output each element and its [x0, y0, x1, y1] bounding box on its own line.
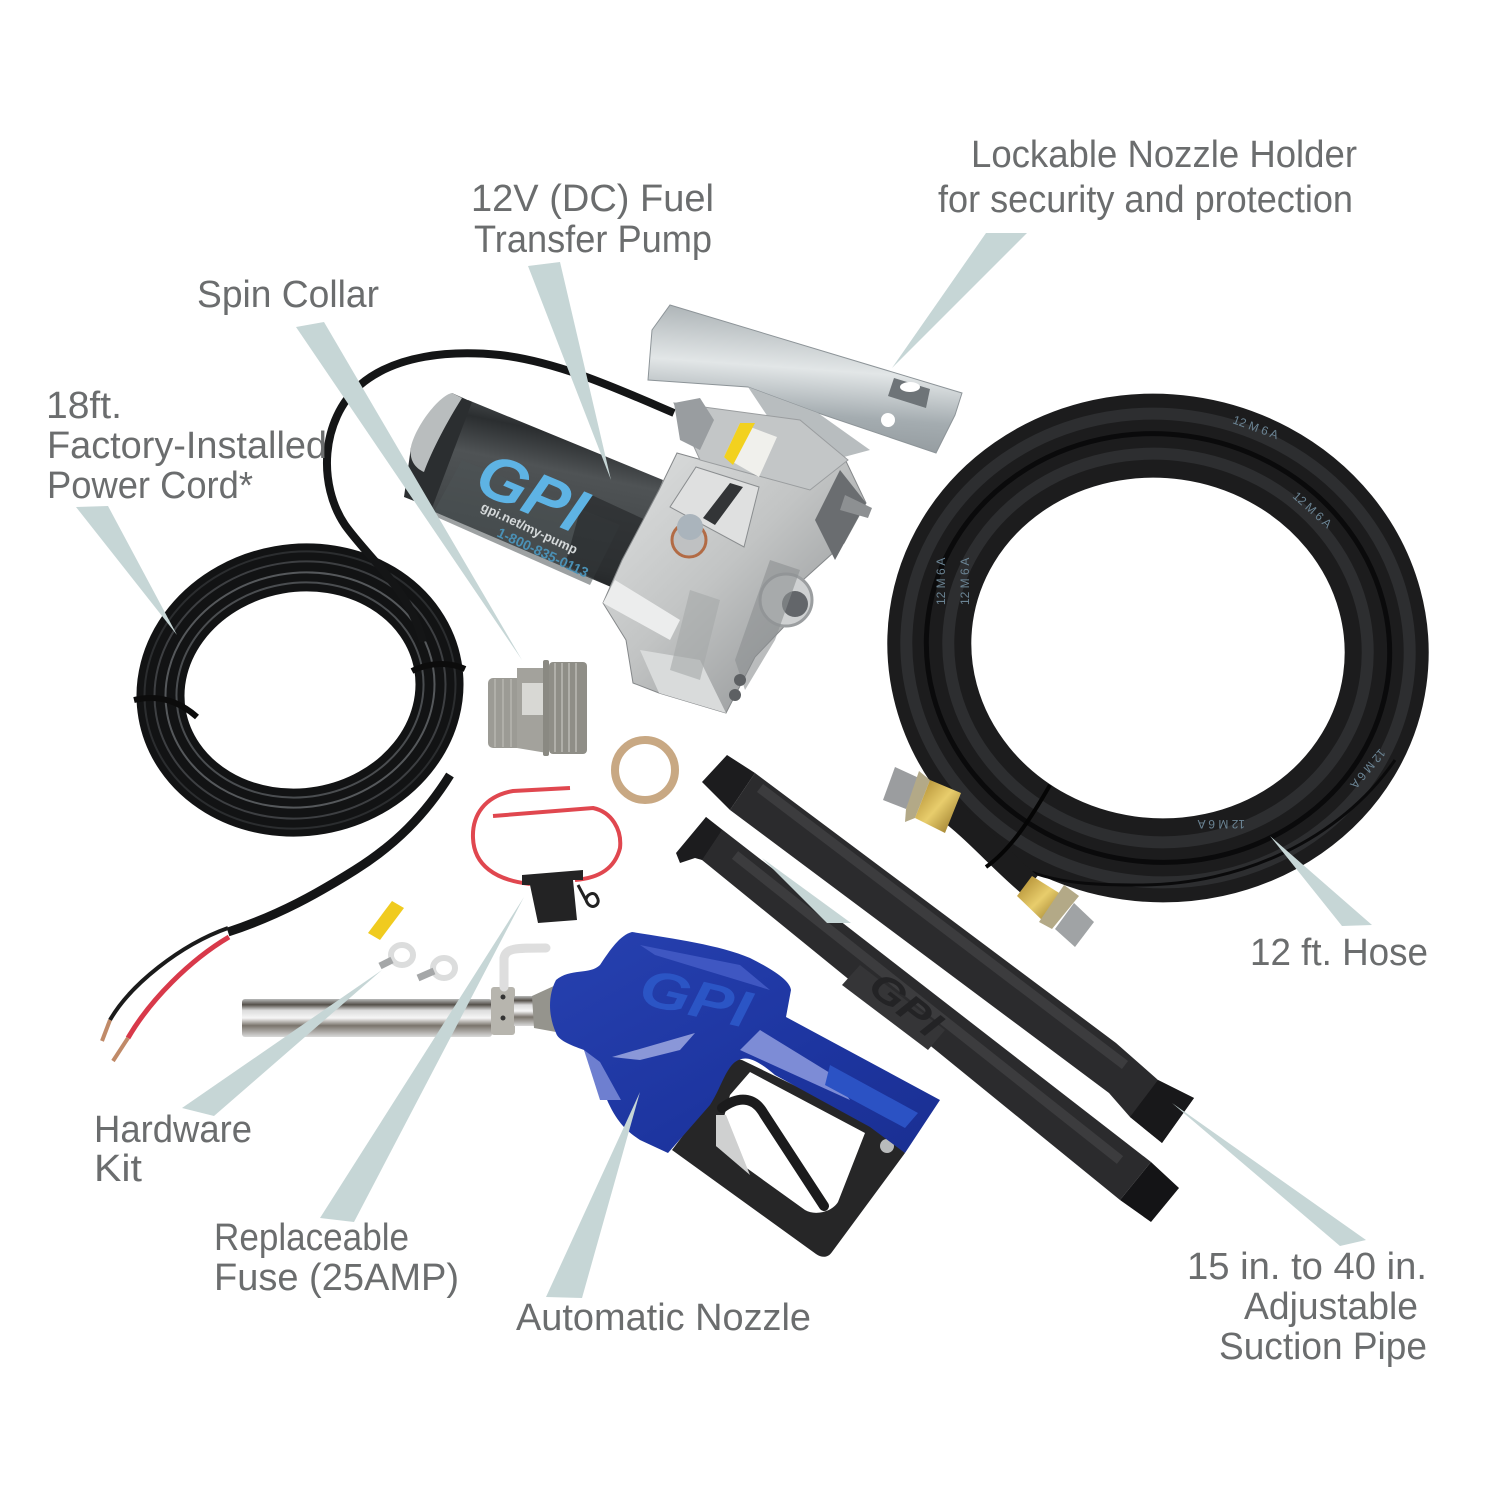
- label: hardware kit: [94, 1109, 252, 1190]
- callout pointer: hose: [1270, 836, 1372, 926]
- motor logo: GPI: [467, 439, 598, 547]
- suction pipe lower: GPI: [860, 964, 951, 1047]
- cord wire ends: [102, 928, 229, 1061]
- label: fuel transfer pump: Transfer Pump: [474, 219, 712, 261]
- cord lead to wire ends: [228, 775, 450, 932]
- hardware kit: [368, 901, 455, 978]
- label: automatic nozzle: Automatic Nozzle: [516, 1297, 811, 1339]
- callout pointer: lockable nozzle holder: [892, 233, 1027, 368]
- callout pointer: hardware kit: [182, 970, 382, 1116]
- label: suction pipe: Suction Pipe: [1219, 1326, 1427, 1368]
- suction pipe upper: [702, 755, 1194, 1143]
- hose print markings: [934, 413, 1388, 831]
- fuse wire: [473, 788, 620, 884]
- automatic nozzle body: [550, 932, 940, 1153]
- label: power cord: Power Cord*: [47, 465, 253, 507]
- automatic nozzle handle and trigger: [672, 1057, 905, 1257]
- label: lockable nozzle holder: Lockable Nozzle Holder: [971, 134, 1357, 176]
- fuse holder: [522, 870, 598, 923]
- label: fuse: Replaceable: [214, 1217, 409, 1259]
- hose fitting top: [883, 767, 961, 833]
- pump: nozzle holder bracket: [648, 305, 962, 457]
- hose print markings: 12 M 6 A: [1198, 817, 1245, 831]
- callout pointer: fuse: [320, 897, 524, 1222]
- hose coil: [876, 381, 1440, 915]
- spin collar: [488, 660, 587, 756]
- pump: gear housing: [603, 398, 872, 713]
- automatic nozzle spout: [242, 948, 556, 1037]
- callout pointer: suction pipe: [1172, 1103, 1366, 1246]
- suction pipe lower: [676, 817, 1179, 1222]
- gasket: [615, 740, 675, 800]
- pump: motor: 1-800-835-0113: [495, 524, 591, 581]
- pump: motor: [404, 393, 663, 590]
- callout pointer: spin collar: [296, 322, 522, 660]
- label: lockable nozzle holder: [938, 134, 1357, 221]
- hose print markings: 12 M 6 A: [1347, 746, 1388, 791]
- pump: motor: gpi.net/my-pump: [479, 499, 580, 557]
- label: suction pipe: Adjustable: [1244, 1286, 1418, 1328]
- label: suction pipe: [1187, 1246, 1427, 1368]
- hose print markings: 12 M 6 A: [934, 558, 948, 605]
- callout pointer: power cord: [76, 506, 177, 635]
- hose print markings: 12 M 6 A: [1231, 413, 1280, 442]
- callout pointer: fuel transfer pump: [528, 262, 611, 480]
- automatic nozzle body: GPI: [634, 958, 758, 1040]
- label: suction pipe: 15 in. to 40 in.: [1187, 1246, 1427, 1288]
- label: fuel transfer pump: 12V (DC) Fuel: [471, 178, 714, 220]
- hose print markings: 12 M 6 A: [958, 558, 972, 605]
- callout pointer: pipe upper section: [762, 858, 851, 923]
- label: fuse: Fuse (25AMP): [214, 1257, 459, 1299]
- label: lockable nozzle holder: for security and protection: [938, 179, 1353, 221]
- label: spin collar: Spin Collar: [197, 274, 379, 316]
- trigger lever: [722, 1100, 824, 1206]
- callout pointer: automatic nozzle: [546, 1092, 640, 1298]
- label: power cord: Factory-Installed: [47, 425, 327, 467]
- label: hardware kit: Kit: [94, 1148, 142, 1190]
- label: hardware kit: Hardware: [94, 1109, 252, 1151]
- label: power cord: 18ft.: [46, 385, 122, 427]
- hose print markings: 12 M 6 A: [1290, 489, 1335, 531]
- label: fuel transfer pump: [471, 178, 714, 261]
- cord lead to pump: [327, 353, 674, 642]
- cord zip ties: [134, 664, 465, 717]
- power cord coil: [122, 353, 674, 853]
- label: fuse: [214, 1217, 459, 1299]
- hose fitting bottom: [1017, 876, 1094, 947]
- label: hose: 12 ft. Hose: [1250, 932, 1428, 974]
- label: power cord: [46, 385, 327, 507]
